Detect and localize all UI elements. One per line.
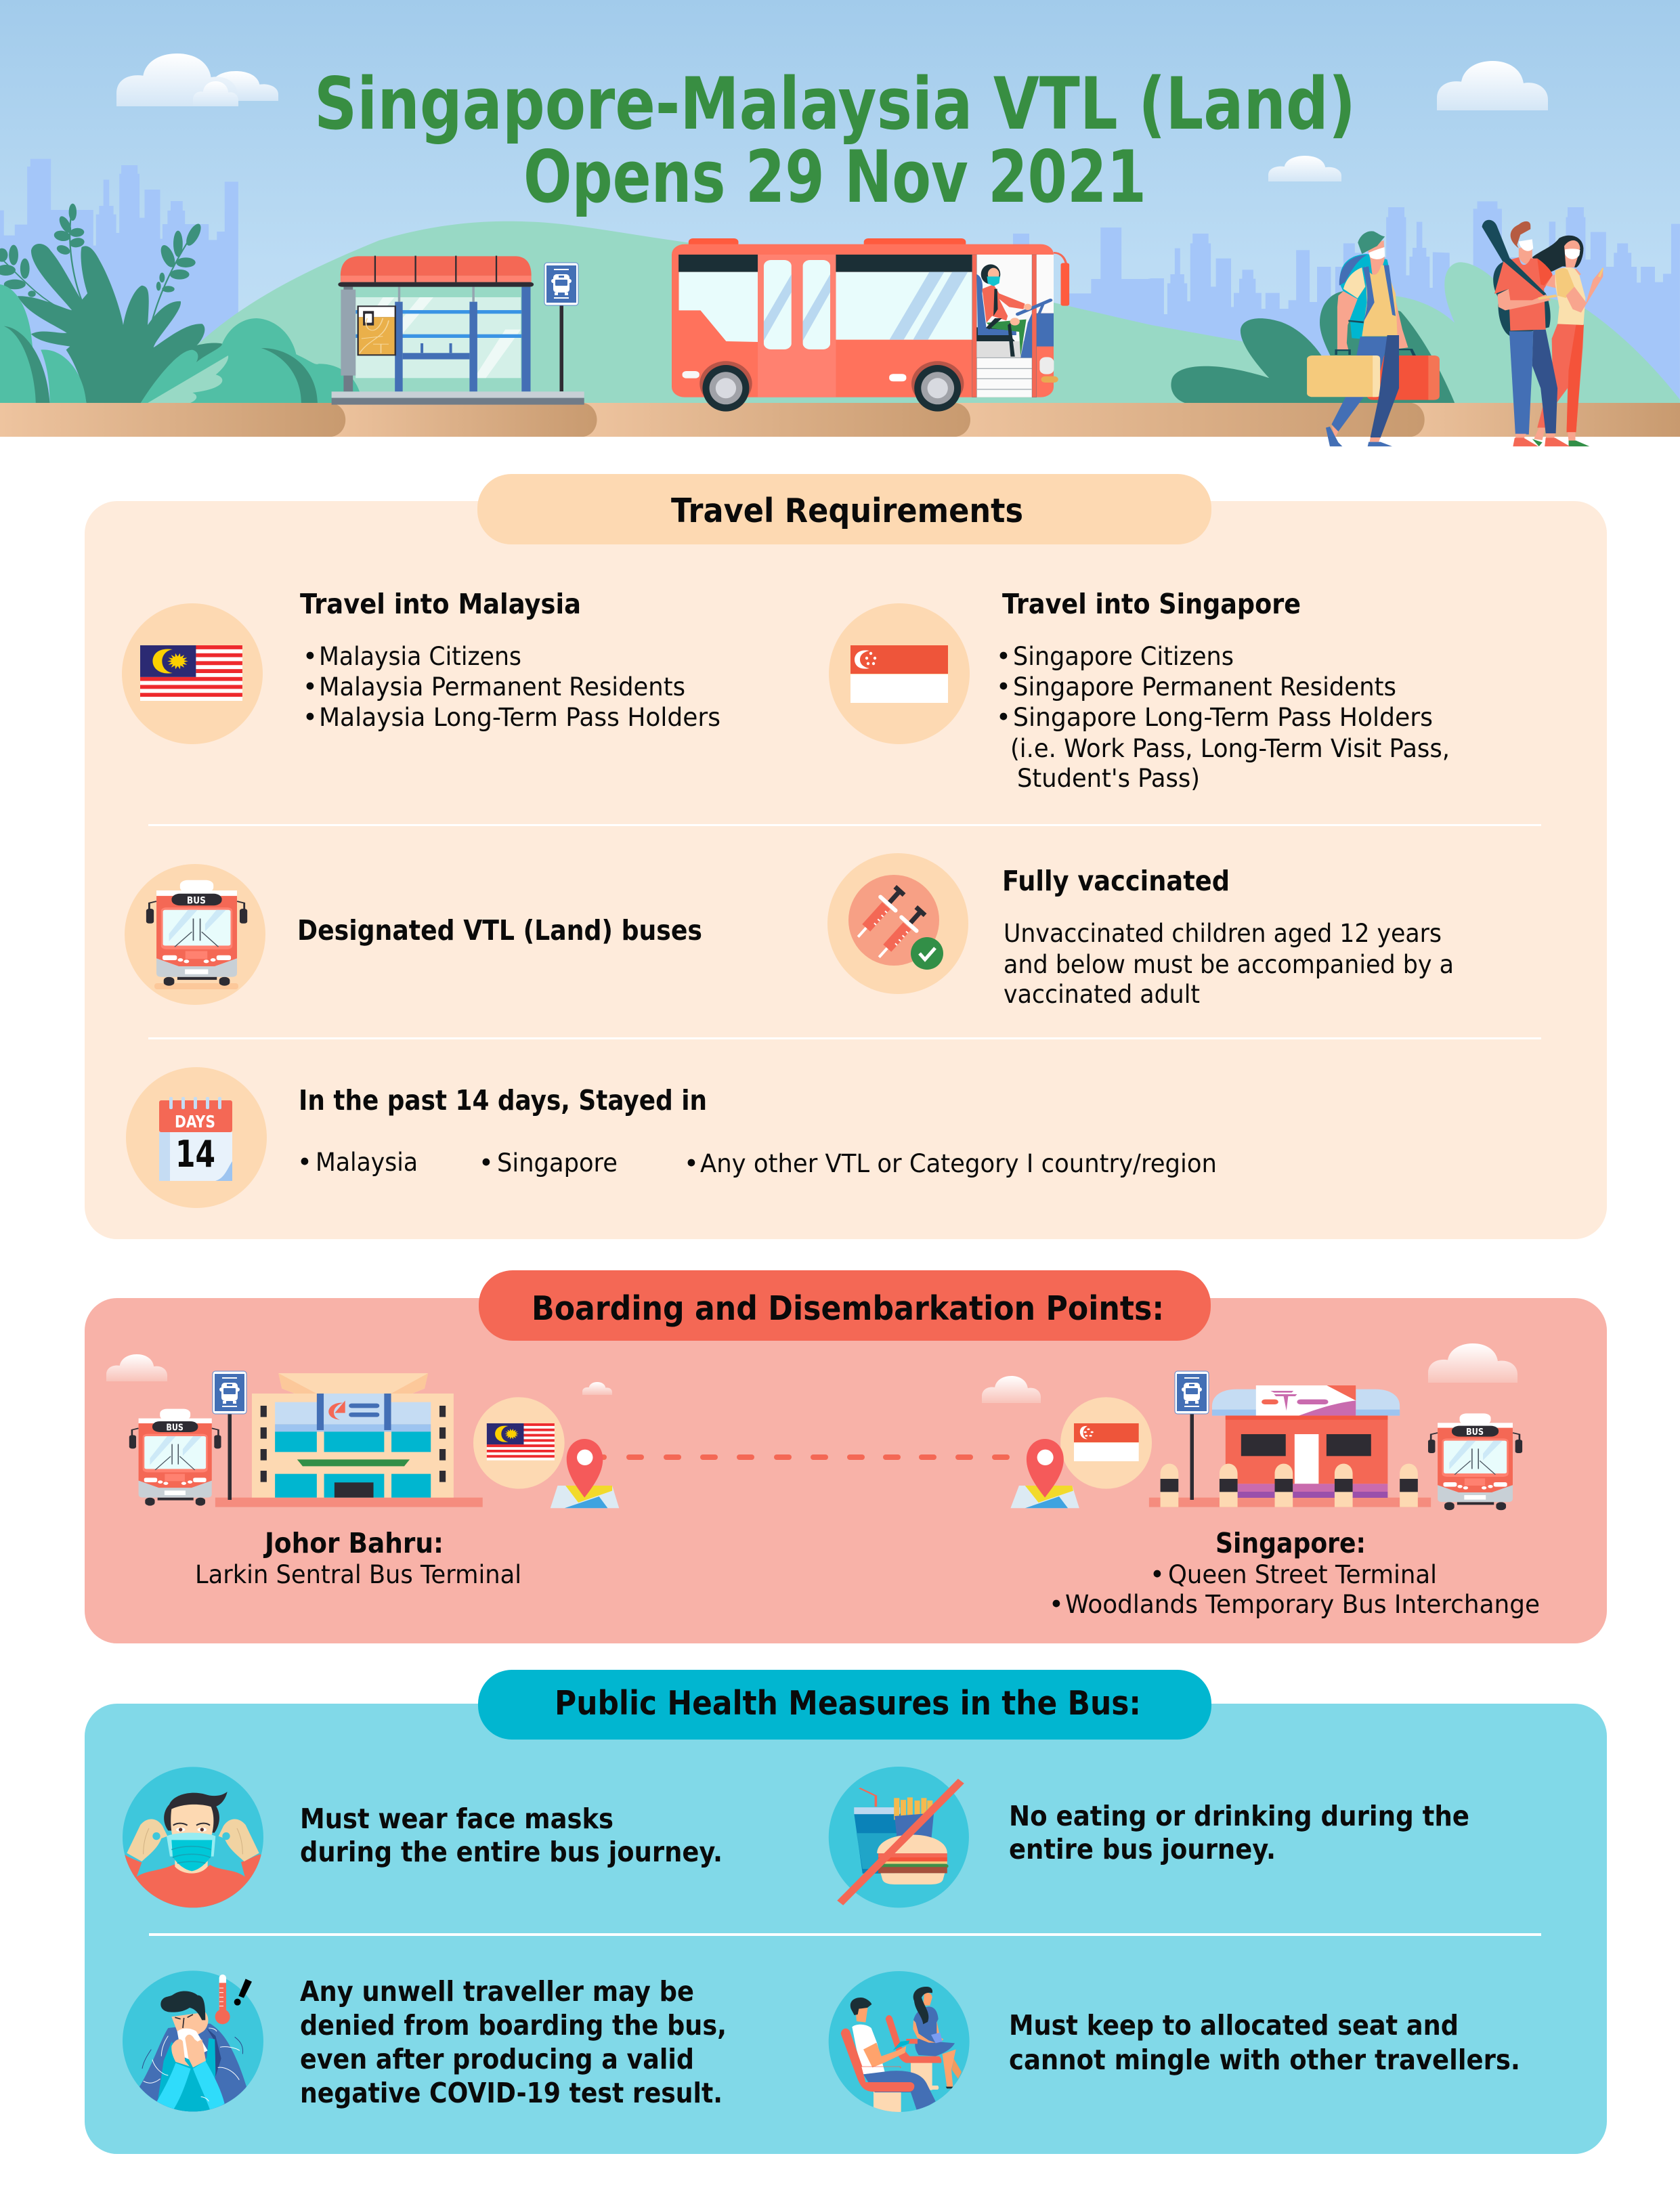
clouds coral [106,1343,1517,1403]
hills [144,221,1680,403]
panel: public health measures [85,1670,1607,2154]
building Queen Street [1212,1385,1400,1498]
shelter platform [332,391,584,405]
Singapore label: • [1049,1590,1064,1619]
icon: calendar 14 days: DAYS [175,1112,215,1131]
ground road [0,403,1680,437]
skyline behind bus [1013,234,1029,271]
No eating text: entire bus journey. [1009,1833,1276,1865]
travellers [1171,220,1603,446]
past 14 days text: • [297,1148,312,1177]
Fully vaccinated text: and below must be accompanied by a [1004,950,1454,979]
Must keep to allocated seat text: cannot mingle with other travellers. [1009,2044,1520,2076]
Singapore label: • [1150,1560,1165,1589]
bus front right: BUS [1466,1427,1484,1438]
Must keep to allocated seat text: Must keep to allocated seat and [1009,2009,1459,2042]
Travel into Singapore text: Singapore Permanent Residents [1013,672,1396,702]
Any unwell traveller text: denied from boarding the bus, [300,2009,727,2042]
Travel into Malaysia text: Malaysia Long-Term Pass Holders [319,703,720,732]
Travel into Singapore text: Singapore Long-Term Pass Holders [1013,703,1433,732]
Singapore label: Singapore: [1215,1527,1366,1559]
icon: bus front: BUS [187,894,206,906]
Singapore label: Woodlands Temporary Bus Interchange [1065,1590,1540,1619]
Johor Bahru label [195,1527,521,1589]
Fully vaccinated text: Fully vaccinated [1002,865,1230,897]
icon: unwell traveller [123,1970,263,2117]
route dashes [589,1454,1010,1460]
clouds [116,53,1548,181]
bus front left [129,1409,221,1506]
Travel into Malaysia text: Malaysia Citizens [319,642,521,671]
Travel into Malaysia text [300,588,720,732]
scene: Johor Bahru terminal [129,1373,619,1508]
scene: Singapore terminal [1010,1385,1522,1510]
Travel into Malaysia text: Travel into Malaysia [300,588,581,620]
past 14 days text [297,1084,1217,1178]
Travel into Malaysia text: Malaysia Permanent Residents [319,672,685,702]
past 14 days text: Any other VTL or Category I country/region [700,1149,1217,1178]
skyline right [1067,201,1680,403]
Any unwell traveller text [300,1975,727,2109]
heading pill: public health: Public Health Measures in the Bus: [555,1684,1141,1723]
past 14 days text: • [479,1148,494,1178]
Travel into Singapore text: (i.e. Work Pass, Long-Term Visit Pass, [1010,734,1450,763]
icon: man wearing mask [123,1767,263,1908]
heading pill: travel requirements: Travel Requirements [671,492,1023,530]
Singapore label [1049,1527,1540,1619]
Travel into Malaysia text: • [303,703,318,732]
panel: boarding and disembarkation points [85,1270,1607,1643]
sky background [0,0,1680,406]
Must wear face masks text: Must wear face masks [300,1803,613,1835]
panel background [85,1704,1607,2154]
icon: no food or drink [829,1767,969,1907]
icon: calendar 14 days [126,1067,267,1208]
stop sign right [1175,1371,1209,1500]
icon: Malaysia flag [122,603,263,744]
Travel into Singapore text: • [996,672,1011,702]
bollards [1161,1464,1418,1507]
title: Singapore-Malaysia VTL (Land) [314,62,1356,146]
panel: travel requirements [85,474,1607,1239]
Designated buses text: Designated VTL (Land) buses [297,914,702,947]
Any unwell traveller text: negative COVID-19 test result. [300,2077,723,2109]
panel background [85,1298,1607,1643]
No eating text: No eating or drinking during the [1009,1800,1469,1832]
Travel into Singapore text: Travel into Singapore [1002,588,1301,620]
location pin left [551,1439,619,1508]
Johor Bahru label: Larkin Sentral Bus Terminal [195,1560,521,1589]
plants left [0,204,360,403]
Singapore flag badge [1060,1397,1152,1489]
stop sign left [213,1371,246,1500]
Must wear face masks text [300,1803,723,1868]
icon: bus front [125,864,265,1005]
Travel into Singapore text: Student's Pass) [1017,764,1200,793]
Must keep to allocated seat text [1009,2009,1520,2076]
Travel into Singapore text: • [996,703,1011,732]
Travel into Singapore text [996,588,1450,793]
heading pill: boarding [479,1270,1211,1341]
Any unwell traveller text: even after producing a valid [300,2043,694,2075]
main bus [672,238,1069,412]
panel background [85,501,1607,1239]
Travel into Malaysia text: • [303,672,318,702]
Travel into Singapore text: Singapore Citizens [1013,642,1234,671]
bus front left: BUS [166,1423,184,1433]
icon: calendar 14 days: 14 [175,1133,215,1176]
No eating text [1009,1800,1469,1865]
past 14 days text: • [684,1149,699,1178]
Fully vaccinated text [1002,865,1454,1009]
icon: seated travellers [829,1971,970,2115]
heading pill: public health [478,1670,1211,1740]
icon: Singapore flag [829,603,970,744]
past 14 days text: Singapore [497,1148,618,1178]
building Larkin Sentral [252,1373,454,1498]
location pin right [1010,1439,1079,1508]
bus stop sign [544,263,578,391]
heading pill: boarding: Boarding and Disembarkation Points: [532,1289,1164,1328]
Any unwell traveller text: Any unwell traveller may be [300,1975,694,2008]
Travel into Malaysia text: • [303,642,318,671]
Fully vaccinated text: Unvaccinated children aged 12 years [1004,919,1442,948]
title [314,62,1356,219]
Malaysia flag badge [473,1397,565,1489]
Must wear face masks text: during the entire bus journey. [300,1836,723,1868]
title: Opens 29 Nov 2021 [523,135,1146,219]
Singapore label: Queen Street Terminal [1168,1560,1437,1589]
bus front right [1428,1413,1522,1510]
Travel into Singapore text: • [996,642,1011,671]
skyline left [0,159,238,403]
bus shelter [338,256,534,391]
heading pill: travel requirements [477,474,1211,544]
icon: vaccine syringes [827,853,968,994]
header illustration [0,0,1680,446]
Fully vaccinated text: vaccinated adult [1004,980,1200,1009]
past 14 days text: In the past 14 days, Stayed in [299,1084,707,1117]
Johor Bahru label: Johor Bahru: [263,1527,444,1559]
past 14 days text: Malaysia [316,1148,418,1177]
